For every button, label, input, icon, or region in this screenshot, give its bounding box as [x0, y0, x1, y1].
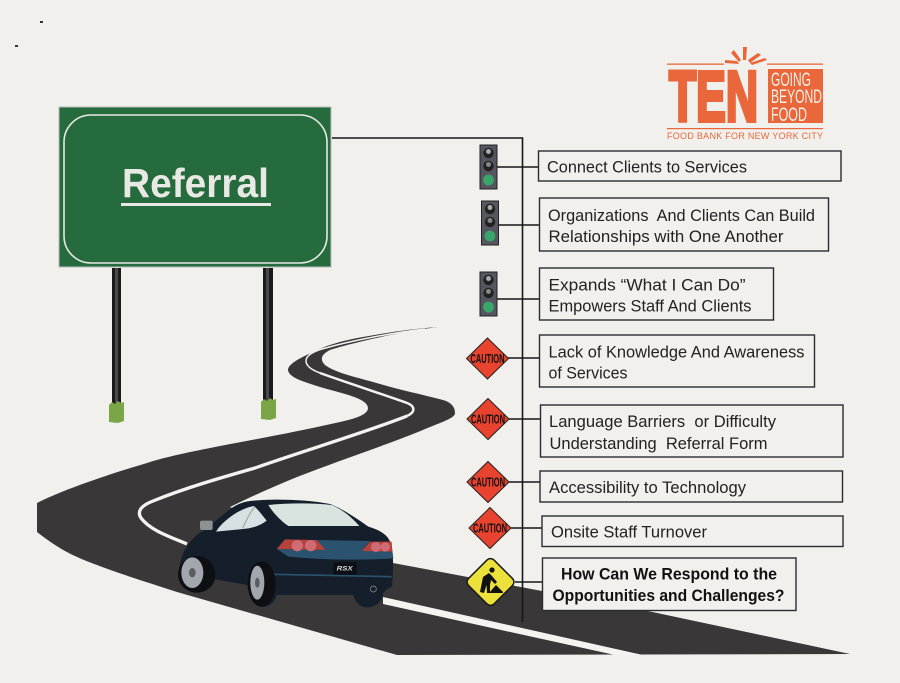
caution sign 1: [466, 338, 508, 379]
caution sign 3: CAUTION: [471, 474, 505, 490]
panel: expands what I can do: Empowers Staff And Clients: [548, 298, 752, 316]
icon: sunburst: [725, 47, 767, 65]
panel: organizations and clients: Organizations And Clients Can Build: [548, 207, 815, 225]
rear window: [268, 503, 359, 526]
side window: [216, 506, 267, 532]
car body: [179, 500, 393, 607]
panel: language barriers: Understanding Referral Form: [550, 435, 768, 453]
logo: TEN food bank: BEYOND: [771, 87, 822, 108]
panel: expands what I can do: [540, 268, 774, 320]
panel: connect clients: [538, 151, 841, 181]
panel: lack of knowledge: [540, 335, 814, 387]
panel: onsite staff turnover: [542, 516, 843, 546]
right sign post: [261, 268, 276, 420]
front wheel: [178, 556, 215, 593]
caution sign 2: CAUTION: [471, 412, 505, 426]
caution sign 3: [467, 462, 509, 502]
traffic light 3: [480, 272, 497, 316]
panel: organizations and clients: [540, 198, 828, 251]
icon: road work sign: [465, 557, 516, 607]
left sign post: [109, 268, 124, 423]
rear wheel: [248, 561, 276, 607]
panel: connect clients: Connect Clients to Services: [547, 158, 747, 176]
referral road sign: Referral: [122, 160, 269, 206]
logo: TEN food bank: FOOD BANK FOR NEW YORK CITY: [667, 131, 823, 141]
traffic light 1: [480, 145, 497, 189]
mirror: [200, 521, 213, 530]
panel: accessibility: [540, 471, 842, 502]
logo: TEN food bank: FOOD: [771, 105, 807, 126]
panel: how can we respond: [542, 558, 796, 610]
panel: how can we respond: Opportunities and Challenges?: [552, 587, 784, 605]
panel: expands what I can do: Expands “What I Can Do”: [548, 276, 746, 294]
logo: TEN food bank: GOING: [771, 70, 811, 91]
caution sign 1: CAUTION: [470, 351, 504, 366]
left tail light: [277, 539, 326, 550]
panel: accessibility: Accessibility to Technology: [549, 479, 747, 497]
licence plate: [333, 562, 357, 575]
caution sign 4: [469, 508, 511, 548]
caution sign 4: CAUTION: [473, 520, 507, 536]
car: [178, 500, 393, 607]
referral road sign: [59, 107, 331, 267]
panel: how can we respond: How Can We Respond to the: [561, 566, 777, 584]
traffic light 2: [482, 201, 498, 245]
blue trunk band: [277, 540, 393, 560]
panel: language barriers: Language Barriers or Difficulty: [549, 413, 777, 431]
panel: language barriers: [540, 405, 843, 457]
car: RSX: [337, 566, 354, 572]
panel: onsite staff turnover: Onsite Staff Turnover: [551, 524, 708, 542]
logo: TEN food bank: TEN: [669, 58, 758, 137]
caution sign 2: [467, 398, 509, 440]
panel: lack of knowledge: Lack of Knowledge And Awareness: [548, 344, 804, 362]
connector lines: [332, 138, 542, 622]
road: [37, 327, 850, 655]
panel: organizations and clients: Relationships with One Another: [548, 228, 784, 246]
road centre line: [139, 329, 643, 655]
right tail light: [362, 542, 392, 552]
panel: lack of knowledge: of Services: [548, 364, 628, 382]
